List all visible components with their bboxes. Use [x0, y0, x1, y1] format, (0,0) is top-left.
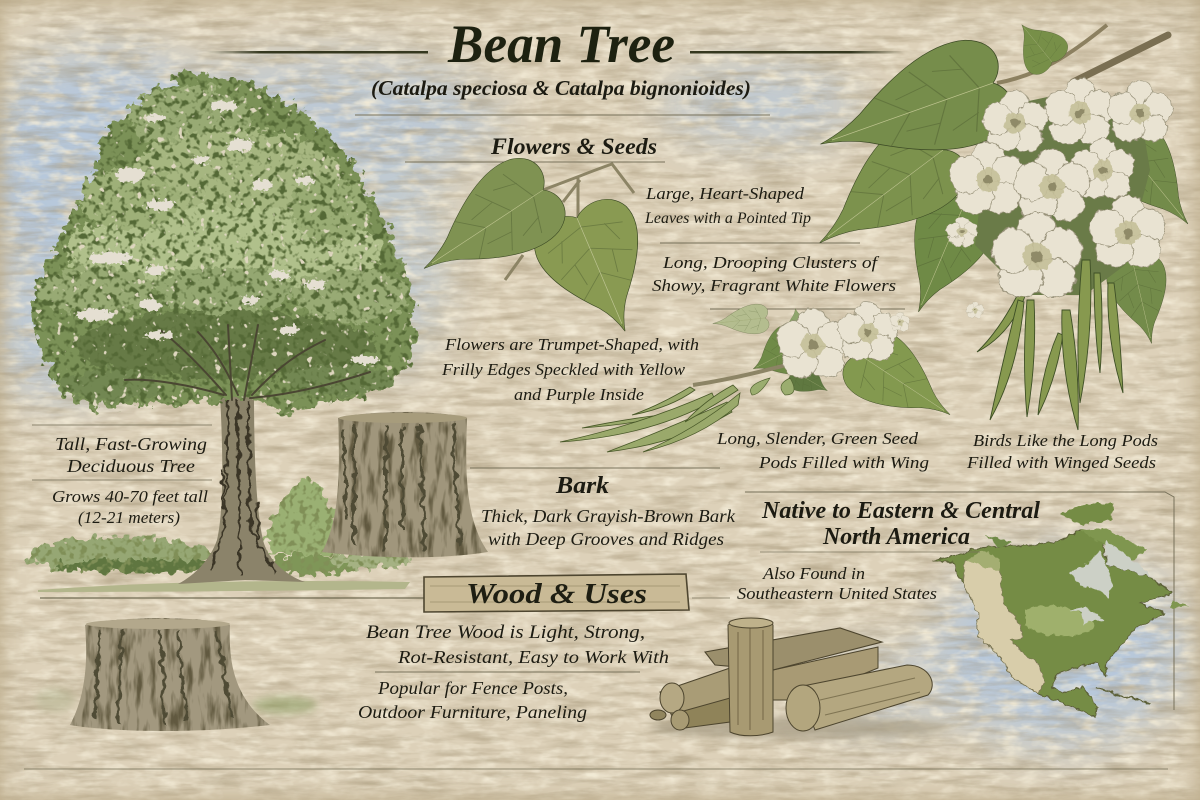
section: bark: with Deep Grooves and Ridges [488, 529, 724, 549]
flowering branch illustration [792, 10, 1200, 430]
text: leaves: Leaves with a Pointed Tip [644, 210, 811, 227]
canopy [35, 72, 415, 412]
text: wood description: Rot-Resistant, Easy to Work With [397, 647, 669, 667]
stump: wood section [35, 618, 317, 731]
north america map [745, 492, 1188, 717]
text: seed pods: Pods Filled with Wing [758, 453, 929, 472]
stump: bark sample [322, 412, 488, 557]
section: native range: Native to Eastern & Central [761, 498, 1040, 524]
text: trumpet flowers [441, 335, 699, 404]
section: bark: Thick, Dark Grayish-Brown Bark [481, 506, 736, 526]
title: Bean Tree [447, 14, 675, 74]
text: trumpet flowers: Frilly Edges Speckled with Yellow [441, 360, 686, 379]
tree illustration [28, 72, 424, 598]
text: clusters [652, 253, 905, 309]
text: birds [966, 431, 1158, 472]
text: wood description: Outdoor Furniture, Paneling [358, 702, 587, 722]
text: seed pods [716, 429, 929, 472]
text: tree height: Grows 40-70 feet tall [52, 487, 208, 506]
text: wood description: Popular for Fence Posts, [377, 678, 568, 698]
title [205, 14, 905, 115]
text: wood description: Bean Tree Wood is Light, Strong, [366, 622, 645, 643]
wood logs and bench illustration [650, 618, 950, 739]
text: trumpet flowers: and Purple Inside [514, 385, 644, 404]
section: native range: Southeastern United States [737, 584, 937, 603]
banner: wood and uses [424, 574, 730, 612]
text: clusters: Long, Drooping Clusters of [662, 253, 880, 272]
section: native range [737, 498, 1040, 603]
title: (Catalpa speciosa & Catalpa bignonioides) [371, 76, 751, 100]
text: birds: Birds Like the Long Pods [973, 431, 1158, 450]
text: tree height: (12-21 meters) [78, 508, 180, 527]
banner: wood and uses: Wood & Uses [466, 578, 647, 610]
section: bark: Bark [555, 473, 609, 499]
ground foliage [28, 478, 410, 575]
text: birds: Filled with Winged Seeds [966, 453, 1156, 472]
text: leaves: Large, Heart-Shaped [645, 184, 805, 203]
leaf pair illustration [399, 147, 673, 352]
blossoms [77, 101, 379, 364]
section: bark [470, 468, 736, 549]
text: leaves [644, 184, 860, 243]
text: trumpet flowers: Flowers are Trumpet-Shaped, with [444, 335, 699, 354]
seed pod branch illustration [560, 303, 970, 452]
text: tree height: Tall, Fast-Growing [55, 434, 207, 454]
heading: flowers and seeds: Flowers & Seeds [490, 134, 657, 159]
text: tree height: Deciduous Tree [66, 456, 195, 476]
text: tree height [32, 425, 212, 527]
text: clusters: Showy, Fragrant White Flowers [652, 276, 896, 295]
section: native range: Also Found in [762, 564, 865, 583]
text: wood description [358, 622, 669, 722]
limbs [125, 325, 370, 400]
trunk [178, 395, 305, 584]
text: seed pods: Long, Slender, Green Seed [716, 429, 919, 448]
section: native range: North America [822, 524, 970, 550]
